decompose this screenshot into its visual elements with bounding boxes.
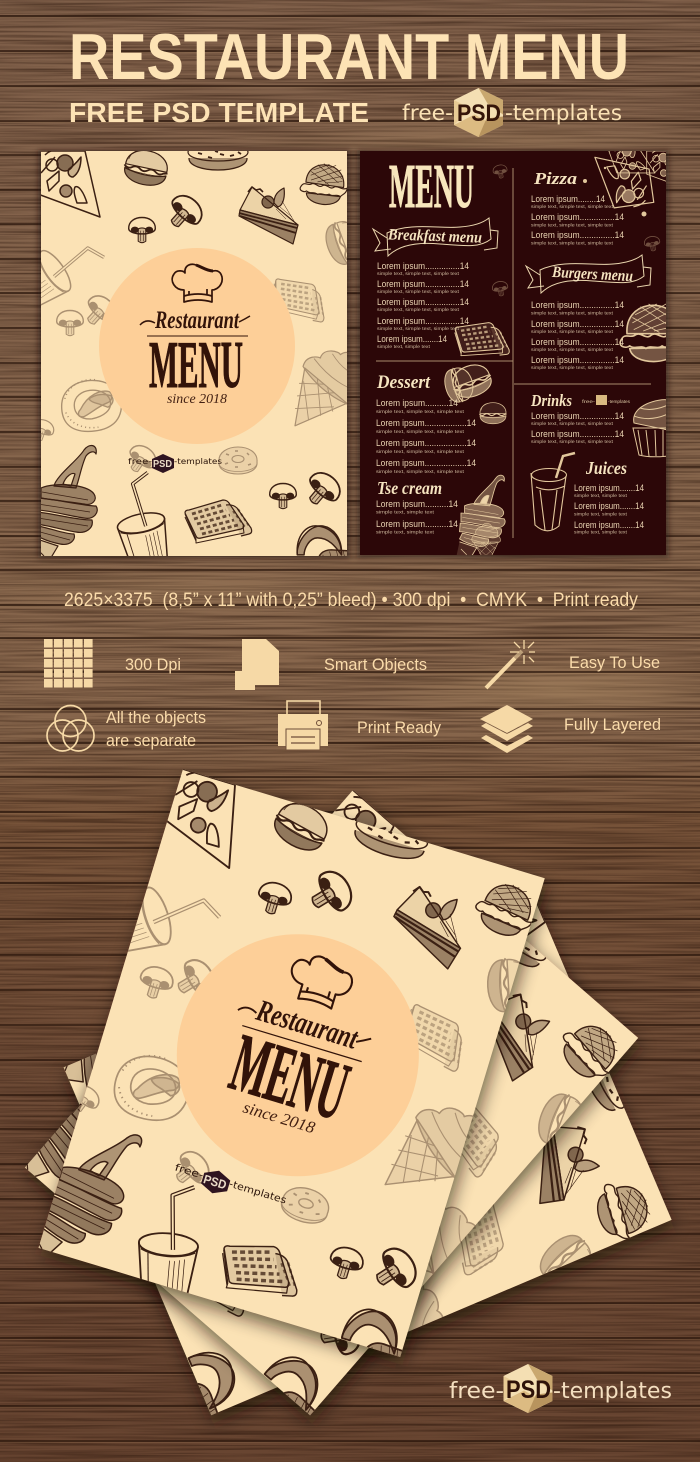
subtitle: FREE PSD TEMPLATE [69, 97, 369, 128]
logo: free-PSD-templates header [402, 88, 622, 137]
front sheet peach circle [147, 904, 449, 1206]
label: 300 Dpi: 300 Dpi [125, 655, 181, 674]
front sheet logo: -templates [228, 1179, 288, 1207]
menu heading: juices: Juices [585, 458, 627, 478]
menu block: juices: Lorem ipsum.......14 [574, 483, 644, 493]
menu heading: ice cream: Tse cream [377, 478, 442, 498]
menu block: juices: Lorem ipsum.......14 [574, 520, 644, 530]
menu block: dessert [376, 398, 476, 474]
dark page sketches [444, 151, 666, 555]
ribbon: burgers menu [526, 255, 651, 293]
menu block: pizza: simple text, simple text, simple text [531, 240, 614, 246]
menu block: breakfast: Lorem ipsum...............14 [377, 279, 469, 289]
front sheet logo: PSD [202, 1172, 228, 1192]
icon: printer [278, 701, 328, 750]
cover chef hat [172, 264, 222, 302]
icon: overlapping circles [47, 706, 94, 751]
menu block: drinks: simple text, simple text, simple text [531, 439, 614, 444]
menu block: drinks: Lorem ipsum...............14 [531, 411, 624, 421]
menu block: breakfast: simple text, simple text, simple text [377, 271, 460, 276]
menu block: burgers: simple text, simple text, simple text [531, 329, 614, 334]
menu block: burgers: simple text, simple text, simple text [531, 310, 614, 316]
icon: layers [480, 705, 533, 753]
panel: cream menu cover [0, 146, 377, 580]
icon: smart object [235, 639, 279, 690]
logo: free-PSD-templates footer: PSD [506, 1376, 551, 1404]
menu block: burgers: Lorem ipsum...............14 [531, 319, 624, 329]
front sheet restaurant script: Restaurant [252, 992, 363, 1056]
cover restaurant script: Restaurant [154, 307, 240, 334]
label: All the objects are separate: All the objects [106, 708, 206, 727]
menu block: burgers: simple text, simple text, simple text [531, 347, 614, 352]
menu block: pizza: Lorem ipsum...............14 [531, 230, 624, 240]
ribbon: burgers menu: Burgers menu [551, 264, 633, 285]
panel: dark menu page: MENU [389, 153, 474, 221]
menu block: juices: simple text, simple text [574, 512, 628, 516]
logo: free-PSD-templates footer [449, 1364, 672, 1413]
menu stack: back sheet 2 [0, 750, 670, 1462]
menu block: ice cream: Lorem ipsum..........14 [376, 519, 458, 529]
front sheet since 2018: since 2018 [241, 1098, 318, 1137]
front sheet logo [171, 1158, 289, 1214]
menu block: burgers: Lorem ipsum...............14 [531, 337, 624, 347]
menu block: breakfast: simple text, simple text, simple text [377, 289, 460, 294]
label: All the objects are separate: are separate [106, 731, 196, 750]
menu block: juices: simple text, simple text [574, 530, 628, 534]
menu block: breakfast: Lorem ipsum.......14 [377, 334, 447, 344]
cover logo: -templates [174, 457, 222, 466]
label: Smart Objects: Smart Objects [324, 655, 427, 674]
menu block: pizza: simple text, simple text, simple text [531, 222, 614, 228]
menu block: ice cream [376, 499, 458, 534]
menu block: drinks: simple text, simple text, simple text [531, 421, 614, 426]
menu block: pizza: Lorem ipsum...............14 [531, 212, 624, 222]
icon: grid [44, 639, 93, 688]
menu block: pizza [531, 194, 624, 246]
ribbon: breakfast menu [373, 218, 498, 256]
dark page dividers [376, 168, 651, 538]
small logo on dark page [582, 395, 631, 405]
menu block: dessert: simple text, simple text, simple text [376, 469, 465, 474]
menu block: burgers: Lorem ipsum...............14 [531, 300, 624, 310]
label: Easy To Use: Easy To Use [569, 653, 660, 672]
menu block: dessert: simple text, simple text, simple text [376, 449, 465, 454]
logo: free-PSD-templates header: -templates [505, 101, 622, 125]
menu block: juices: Lorem ipsum.......14 [574, 501, 644, 511]
cover restaurant script [140, 307, 250, 336]
menu block: pizza: simple text, simple text, simple text [531, 204, 614, 209]
menu block: breakfast: simple text, simple text, simple text [377, 307, 460, 312]
label: Print Ready: Print Ready [357, 718, 441, 737]
menu heading: dessert: Dessert [376, 372, 431, 393]
small logo on dark page: -templates [608, 399, 631, 404]
menu block: juices [574, 483, 644, 534]
menu block: ice cream: simple text, simple text [376, 510, 435, 514]
menu block: breakfast: Lorem ipsum...............14 [377, 261, 469, 271]
label: Fully Layered: Fully Layered [564, 715, 661, 734]
logo: free-PSD-templates footer: -templates [553, 1379, 672, 1404]
menu block: juices: simple text, simple text [574, 493, 628, 498]
cover logo [128, 454, 222, 473]
menu block: dessert: Lorem ipsum..........14 [376, 398, 458, 408]
menu block: dessert: Lorem ipsum..................14 [376, 418, 476, 428]
menu block: breakfast [377, 261, 469, 349]
menu block: ice cream: simple text, simple text [376, 530, 435, 534]
label: All the objects are separate [106, 708, 206, 750]
menu block: burgers [531, 300, 624, 370]
cover logo: PSD [153, 459, 172, 470]
front sheet MENU lettering: MENU [221, 1016, 359, 1137]
panel: dark menu page [357, 138, 686, 565]
logo: free-PSD-templates header: free- [402, 101, 453, 125]
front sheet chef hat [284, 950, 357, 1012]
front sheet restaurant script [234, 987, 375, 1062]
menu block: drinks [531, 411, 624, 444]
small logo on dark page: free- [582, 399, 596, 404]
spec line: 2625×3375 (8,5” x 11” with 0,25” bleed) • 300 dpi • CMYK • Print ready [64, 590, 638, 611]
ribbon: breakfast menu: Breakfast menu [387, 226, 482, 247]
menu block: breakfast: Lorem ipsum...............14 [377, 316, 469, 326]
cover logo: free- [128, 457, 152, 466]
menu block: dessert: simple text, simple text, simple text [376, 429, 465, 434]
menu block: breakfast: simple text, simple text, simple text [377, 326, 460, 331]
logo: free-PSD-templates footer: free- [449, 1379, 504, 1404]
icon: magic wand [486, 640, 535, 688]
menu stack: back sheet 3 [16, 820, 692, 1461]
cover since 2018: since 2018 [167, 391, 227, 406]
menu block: dessert: Lorem ipsum..................14 [376, 458, 476, 468]
menu block: drinks: Lorem ipsum...............14 [531, 429, 624, 439]
menu block: pizza: Lorem ipsum........14 [531, 194, 605, 204]
menu block: breakfast: simple text, simple text [377, 344, 431, 349]
menu stack: front sheet [0, 748, 582, 1396]
menu block: burgers: Lorem ipsum...............14 [531, 355, 624, 365]
menu block: ice cream: Lorem ipsum..........14 [376, 499, 458, 509]
panel: cream menu cover: MENU [149, 328, 243, 402]
menu heading: pizza: Pizza [533, 169, 578, 188]
cover peach circle [99, 248, 295, 444]
title: RESTAURANT MENU [69, 21, 629, 93]
menu block: dessert: simple text, simple text, simple text [376, 409, 465, 414]
logo: free-PSD-templates header: PSD [457, 100, 501, 127]
menu block: burgers: simple text, simple text, simple text [531, 365, 614, 370]
menu block: dessert: Lorem ipsum..................14 [376, 438, 476, 448]
menu heading: drinks: Drinks [530, 391, 572, 410]
menu block: breakfast: Lorem ipsum...............14 [377, 297, 469, 307]
front sheet logo: free- [173, 1162, 205, 1182]
